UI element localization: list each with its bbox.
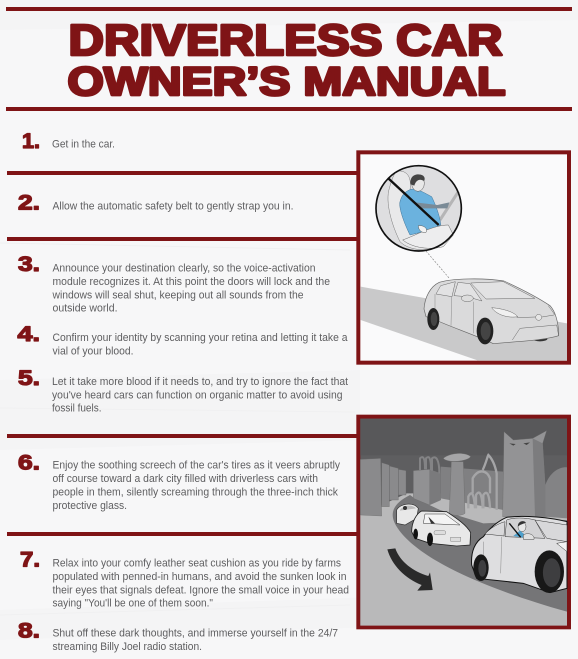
step 3 text <box>52 262 330 314</box>
number 8: 8. <box>18 618 40 642</box>
foreground car with driver <box>472 516 567 593</box>
step 6 text: off course toward a dark city filled with driverless cars with <box>52 473 318 485</box>
divider <box>7 532 358 536</box>
small far car <box>397 504 418 525</box>
step 4 text: vial of your blood. <box>52 346 134 358</box>
middle car <box>412 511 471 546</box>
step 6 <box>18 450 340 512</box>
step 1 text: Get in the car. <box>52 138 115 150</box>
divider <box>7 171 358 175</box>
step 1 <box>22 129 115 153</box>
divider <box>7 237 358 241</box>
step 3 <box>18 252 330 314</box>
title line 2: OWNER’S MANUAL <box>68 60 505 104</box>
step 2 text: Allow the automatic safety belt to gently strap you in. <box>52 200 294 212</box>
panel: dark city illustration <box>358 417 569 627</box>
title line 1: DRIVERLESS CAR <box>68 16 502 65</box>
icon: seated passenger in magnifier circle <box>376 166 461 251</box>
ground <box>360 493 567 626</box>
step 5 text: you've heard cars can function on organic matter to avoid using <box>52 390 342 402</box>
step 6 text: protective glass. <box>52 500 127 512</box>
step 7 text: Relax into your comfy leather seat cushion as you ride by farms <box>52 558 341 570</box>
top rule <box>6 7 572 11</box>
number 2: 2. <box>18 190 40 214</box>
step 7 text: their eyes that signals defeat. Ignore the small voice in your head <box>52 584 349 596</box>
number 5: 5. <box>18 366 40 390</box>
number 3: 3. <box>18 252 40 276</box>
step 6 text <box>52 460 340 512</box>
step 7 text <box>52 558 349 610</box>
step 3 text: windows will seal shut, keeping out all sounds from the <box>52 290 304 302</box>
step 8 <box>18 618 338 653</box>
city buildings <box>360 431 567 518</box>
number 4: 4. <box>18 322 40 346</box>
divider <box>7 434 358 438</box>
step 4 text: Confirm your identity by scanning your retina and letting it take a <box>52 332 348 344</box>
arrow <box>387 548 433 591</box>
step 2 <box>18 190 294 214</box>
step 5 text: fossil fuels. <box>52 402 102 414</box>
step 8 text: Shut off these dark thoughts, and immerse yourself in the 24/7 <box>52 628 338 640</box>
number 7: 7. <box>20 548 40 572</box>
dashed connector <box>426 251 449 278</box>
step 4 <box>18 322 348 358</box>
step 6 text: Enjoy the soothing screech of the car's tires as it veers abruptly <box>52 460 340 472</box>
step 7 text: populated with penned-in humans, and avoid the sunken look in <box>52 571 346 583</box>
bottom rule <box>6 107 572 111</box>
step 3 text: outside world. <box>52 302 118 314</box>
road <box>361 287 567 361</box>
step 3 text: Announce your destination clearly, so the voice-activation <box>52 262 316 274</box>
step 8 text <box>52 628 338 653</box>
number 6: 6. <box>18 450 40 474</box>
icon: car <box>424 279 559 344</box>
panel: car with safety belt illustration <box>358 152 569 363</box>
step 7 text: saying "You'll be one of them soon." <box>52 598 213 610</box>
step 7 <box>20 548 349 610</box>
step 6 text: people in them, silently screaming through the three-inch thick <box>52 486 338 498</box>
step 8 text: streaming Billy Joel radio station. <box>52 641 202 653</box>
step 3 text: module recognizes it. At this point the doors will lock and the <box>52 276 330 288</box>
dark road <box>393 495 567 612</box>
step 4 text <box>52 332 348 358</box>
number 1: 1. <box>22 129 40 153</box>
step 5 <box>18 366 348 414</box>
title <box>6 7 572 111</box>
step 5 text <box>52 376 348 414</box>
step 5 text: Let it take more blood if it needs to, and try to ignore the fact that <box>52 376 348 388</box>
